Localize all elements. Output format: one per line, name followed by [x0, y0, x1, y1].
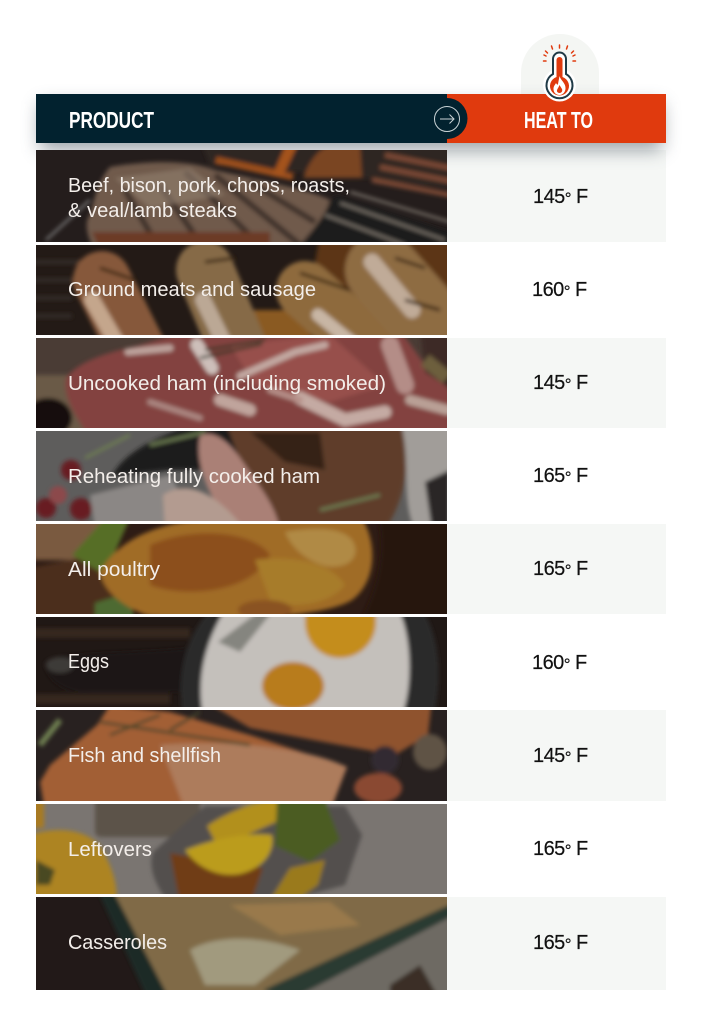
value: fish: °: [565, 748, 571, 767]
row: eggs: [36, 617, 447, 707]
header: heat to: HEAT TO: [524, 107, 593, 133]
label: eggs: Eggs: [68, 650, 109, 673]
value: ground meats: 160: [532, 279, 564, 301]
row: uncooked ham: [36, 338, 447, 428]
label: beef: & veal/lamb steaks: [68, 199, 237, 222]
value: leftovers: 165: [533, 838, 565, 860]
label: uncooked ham: Uncooked ham (including smoked): [68, 372, 386, 395]
value: beef: 145: [533, 186, 565, 208]
label: beef: [68, 177, 348, 217]
row: ground meats: [36, 245, 447, 335]
value: eggs: F: [570, 652, 587, 674]
value: reheating ham: 165: [533, 465, 565, 487]
label: leftovers: Leftovers: [68, 838, 152, 861]
icon: thermometer with flame: [543, 45, 576, 102]
label: poultry: All poultry: [68, 558, 161, 581]
row: reheating ham: [36, 431, 447, 521]
label: beef: Beef, bison, pork, chops, roasts,: [68, 174, 350, 197]
header: product: [36, 94, 467, 143]
value: eggs: °: [564, 655, 570, 674]
value: poultry: 165: [533, 558, 565, 580]
temperature values: [532, 186, 588, 954]
value: reheating ham: °: [565, 468, 571, 487]
value: ground meats: °: [564, 282, 570, 301]
row: casseroles: [36, 897, 447, 990]
value: casseroles: °: [565, 935, 571, 954]
temperature column: [447, 150, 666, 990]
value: uncooked ham: °: [565, 375, 571, 394]
value: leftovers: F: [571, 838, 588, 860]
value: fish: F: [571, 745, 588, 767]
value: ground meats: F: [570, 279, 587, 301]
value: eggs: 160: [532, 652, 564, 674]
icon: arrow in circle: [434, 106, 460, 132]
value: casseroles: F: [571, 932, 588, 954]
label: casseroles: Casseroles: [68, 931, 167, 954]
value: leftovers: °: [565, 841, 571, 860]
header: product: PRODUCT: [69, 107, 154, 133]
value: beef: F: [571, 186, 588, 208]
value: uncooked ham: 145: [533, 372, 565, 394]
label: ground meats: Ground meats and sausage: [68, 278, 316, 301]
header: heat to: [447, 94, 666, 143]
value: fish: 145: [533, 745, 565, 767]
value: poultry: F: [571, 558, 588, 580]
row: beef: [36, 150, 447, 242]
value: beef: °: [565, 189, 571, 208]
row: leftovers: [36, 804, 447, 894]
value: casseroles: 165: [533, 932, 565, 954]
label: reheating ham: Reheating fully cooked ham: [68, 465, 320, 488]
value: uncooked ham: F: [571, 372, 588, 394]
label: fish: Fish and shellfish: [68, 744, 221, 767]
row: poultry: [36, 524, 447, 614]
value: poultry: °: [565, 561, 571, 580]
header shadow: [40, 104, 662, 150]
value: reheating ham: F: [571, 465, 588, 487]
row: fish: [36, 710, 447, 801]
icon backdrop: pale rounded tab: [521, 34, 599, 94]
